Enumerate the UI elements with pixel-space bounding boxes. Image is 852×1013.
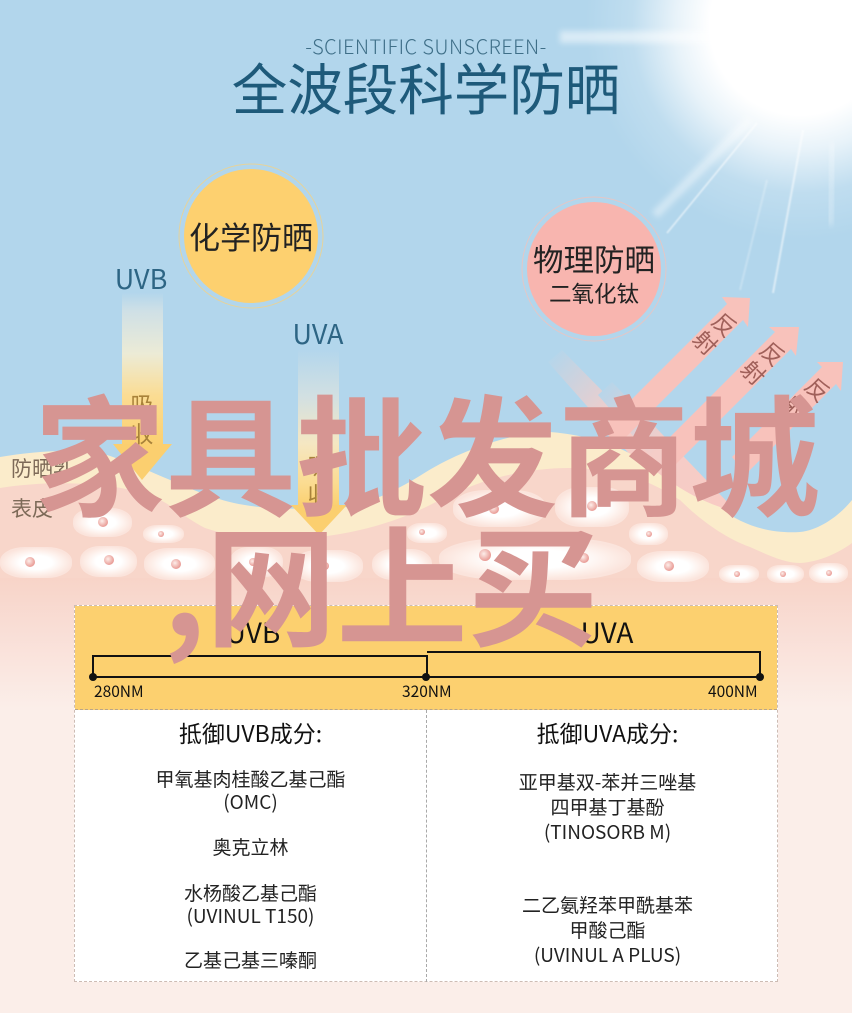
label: epidermis: 表皮 (11, 493, 53, 523)
label: UVB: UVB (115, 258, 167, 297)
column heading UVA: 抵御UVA成分: (537, 715, 678, 749)
column: UVB ingredients (155, 715, 346, 973)
label: UVA: UVA (293, 313, 343, 352)
watermark line 2: ,网上买 (163, 484, 599, 674)
ingredient: UVINUL A PLUS: 甲酸己酯 (569, 916, 646, 943)
column heading UVB: 抵御UVB成分: (179, 715, 322, 749)
skin cells (0, 487, 848, 583)
label: sunscreen layer: 防晒乳 (11, 453, 74, 483)
ingredient: octocrylene: 奥克立林 (212, 833, 288, 860)
ingredient: ethylhexyl triazone: 乙基己基三嗪酮 (184, 946, 317, 973)
label: absorb 2: 吸收 (308, 447, 330, 510)
sky (0, 0, 852, 640)
ingredient: UVINUL T150: 水杨酸乙基己酯 (184, 879, 317, 906)
ingredient: OMC: (OMC) (223, 788, 278, 815)
cell nuclei (25, 501, 832, 577)
tick: 320NM: 320NM (402, 680, 452, 702)
label: UVA band: UVA (581, 612, 633, 652)
labels: reflect: 射 (734, 351, 775, 392)
beam: UVB absorbed (113, 293, 172, 480)
ingredient: UVINUL A PLUS: 二乙氨羟苯甲酰基苯 (522, 891, 693, 918)
ingredient: TINOSORB M: 四甲基丁基酚 (550, 793, 664, 820)
beam: UVA absorbed (291, 350, 347, 535)
label: UVB band: UVB (226, 612, 280, 652)
watermark line 1: 家具批发商城 (34, 354, 820, 544)
ingredient: UVINUL T150: (UVINUL T150) (186, 902, 314, 929)
skin: epidermis (0, 468, 852, 640)
skin fade to page (0, 578, 852, 1013)
eyebrow: scientific sunscreen: -SCIENTIFIC SUNSCREEN- (305, 31, 547, 60)
spectrum table (74, 605, 778, 982)
circle: physical sunscreen (522, 197, 666, 341)
label: absorb 1: 吸收 (130, 386, 154, 449)
column divider (426, 710, 427, 982)
wavelength ruler (89, 651, 764, 681)
ingredient: OMC: 甲氧基肉桂酸乙基己酯 (155, 765, 346, 792)
labels: reflect: 反 (705, 303, 746, 344)
arrows: reflection (602, 297, 843, 474)
label: physical sunscreen: 物理防晒 (533, 236, 655, 280)
circle: chemical sunscreen (179, 164, 323, 308)
column: UVA ingredients (519, 715, 696, 968)
labels: reflect: 反 (753, 332, 794, 373)
skin: sunscreen layer (0, 432, 852, 640)
ingredient: TINOSORB M: 亚甲基双-苯并三唑基 (519, 768, 696, 795)
sun glow (560, 0, 852, 293)
ingredient: UVINUL A PLUS (522, 891, 693, 968)
spectrum band header (75, 606, 777, 710)
ingredient: OMC (155, 765, 346, 815)
ingredient: UVINUL A PLUS: (UVINUL A PLUS) (534, 941, 681, 968)
labels: reflect: 射 (686, 321, 727, 362)
labels: reflect: 反 (798, 368, 839, 409)
tick: 280NM: 280NM (94, 680, 144, 702)
ingredient: UVINUL T150 (184, 879, 317, 929)
label: chemical sunscreen: 化学防晒 (189, 213, 313, 258)
title: 全波段科学防晒 (232, 46, 620, 126)
labels: reflect: 射 (776, 386, 817, 427)
label: titanium dioxide: 二氧化钛 (549, 277, 639, 309)
beams: incoming toward physical sunscreen (548, 350, 735, 528)
tick: 400NM: 400NM (708, 680, 758, 702)
ingredient: TINOSORB M: (TINOSORB M) (544, 818, 671, 845)
ingredient: TINOSORB M (519, 768, 696, 845)
